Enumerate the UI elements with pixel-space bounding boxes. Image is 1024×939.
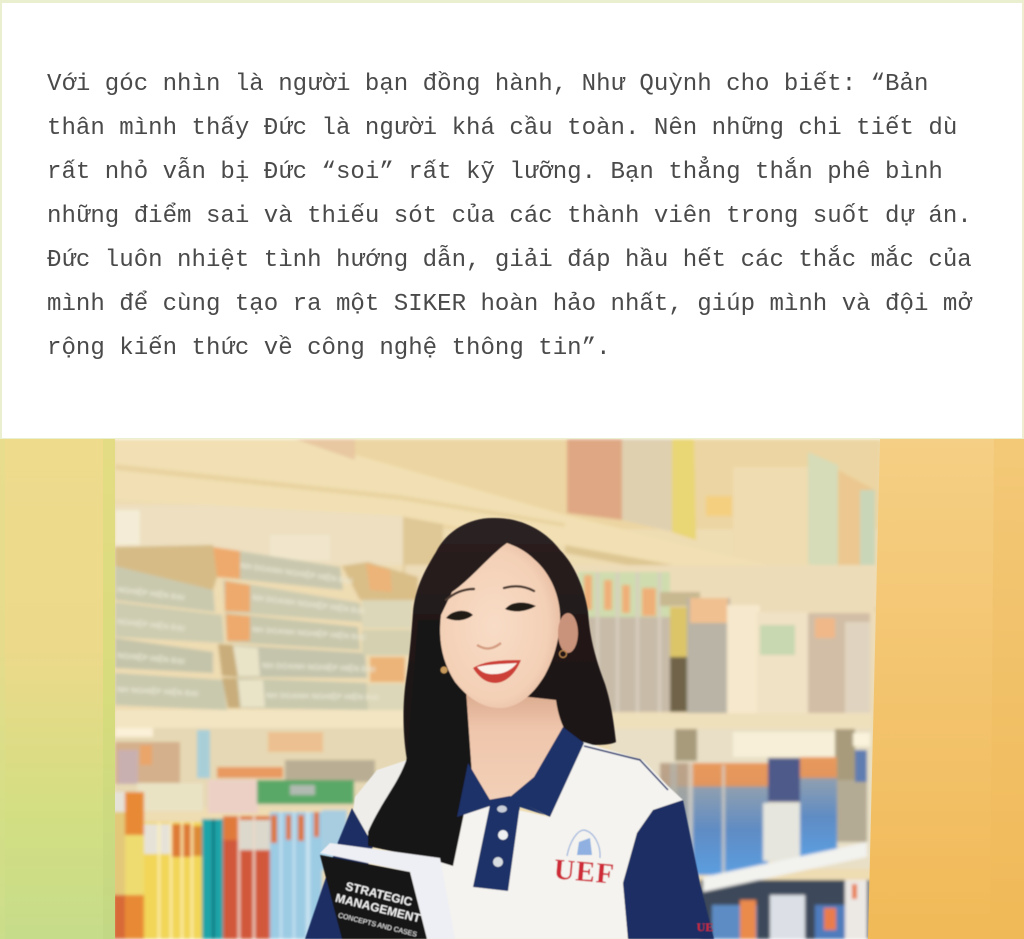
mid shelf background (405, 565, 875, 715)
left pillar (0, 439, 115, 939)
eyes (446, 603, 536, 620)
left book stacks: NGHIỆP HIỆN ĐẠI (117, 585, 185, 602)
nose (477, 643, 501, 649)
photo illustration: student in library (0, 439, 1024, 939)
library background (100, 439, 890, 939)
top shelf board (115, 439, 876, 607)
left book stacks (115, 545, 418, 711)
mouth (473, 660, 521, 683)
right pillar (868, 439, 1024, 939)
left shoulder white (353, 760, 407, 843)
book: MANAGEMENT (334, 891, 423, 926)
collar (457, 727, 584, 817)
panel: quote text area (0, 0, 1024, 439)
student portrait (305, 518, 714, 939)
face (440, 543, 560, 708)
UEF logo: UE (697, 920, 713, 934)
lower background (115, 728, 415, 808)
text block: quote from Như Quỳnh: Với góc nhìn là người bạn đồng hành, Như Quỳnh cho biết: “Bản thân mình thấy Đức là người khá cầu toàn. Nên những chi tiết dù rất nhỏ vẫn bị Đức “soi” rất kỹ lưỡng. Bạn thẳng thắn phê bình những điểm sai và thiếu sót của các thành viên trong suốt dự án. Đức luôn nhiệt tình hướng dẫn, giải đáp hầu hết các thắc mắc của mình để cùng tạo ra một SIKER hoàn hảo nhất, giúp mình và đội mở rộng kiến thức về công nghệ thông tin”. (47, 71, 972, 362)
hair front strands (368, 620, 472, 866)
left book stacks: NH DOANH NGHIỆP HIỆN ĐẠI (240, 561, 353, 586)
lower-left books (113, 792, 347, 939)
book: CONCEPTS AND CASES (337, 912, 418, 939)
right shoulder and white shirt (428, 742, 683, 939)
left book stacks: NH DOANH NGHIỆP HIỆN ĐẠI (266, 691, 379, 702)
UEF logo (553, 830, 713, 934)
eyebrows (446, 586, 534, 600)
neck (466, 690, 566, 802)
left book stacks: NGHIỆP HIỆN ĐẠI (117, 617, 185, 633)
left sleeve (305, 808, 373, 939)
right mid-shelf books (578, 572, 870, 716)
right sleeve (623, 800, 714, 939)
UEF logo: UEF (553, 853, 615, 891)
middle shelf board (115, 710, 405, 728)
left book stacks: NH DOANH NGHIỆP HIỆN ĐẠI (262, 661, 375, 674)
top shelf books (567, 439, 875, 580)
ear and earrings (440, 613, 578, 674)
hair back (367, 518, 616, 865)
book (320, 843, 455, 939)
left book stacks: NH DOANH NGHIỆP HIỆN ĐẠI (252, 625, 365, 642)
placket (473, 805, 520, 891)
lower-right blue books (660, 750, 870, 939)
left book stacks: NH DOANH NGHIỆP HIỆN ĐẠI (252, 593, 365, 616)
left book stacks: NH NGHIỆP HIỆN ĐẠI (117, 685, 199, 698)
left book stacks: NGHIỆP HIỆN ĐẠI (117, 651, 185, 666)
book: STRATEGIC (344, 879, 414, 909)
